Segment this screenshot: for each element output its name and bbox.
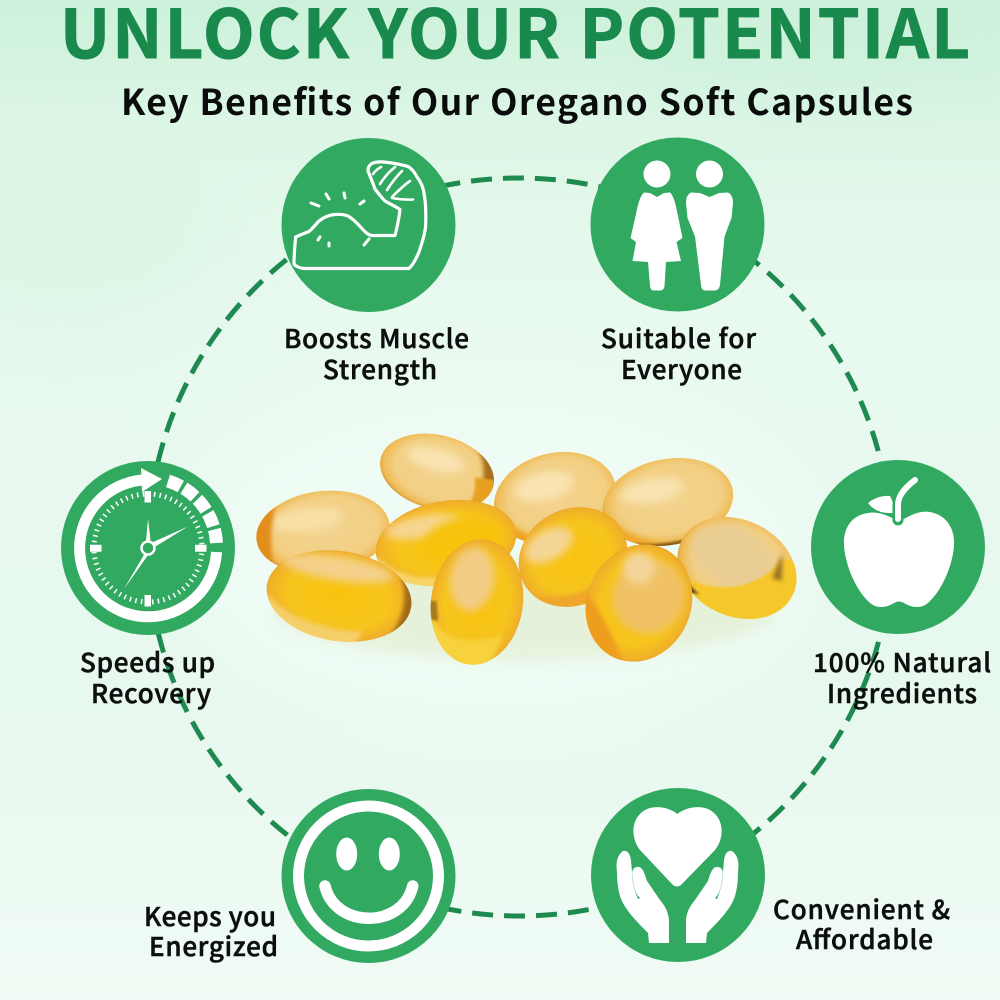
icon: clock (61, 461, 235, 635)
label: speeds up recovery (80, 643, 215, 711)
icon: smiley (282, 789, 456, 963)
capsule 6 (266, 550, 412, 642)
capsule 5 (376, 500, 516, 586)
capsule 1 (380, 434, 494, 506)
label: suitable for everyone: Suitable for (601, 319, 756, 356)
label: boosts muscle strength (284, 319, 469, 387)
label: keeps you energized (144, 897, 278, 964)
label: speeds up recovery: Speeds up (80, 643, 215, 680)
capsule 4 (256, 490, 390, 566)
capsule 8 (518, 507, 628, 607)
label: convenient and affordable (773, 890, 950, 957)
label: suitable for everyone (601, 319, 756, 387)
capsule shadow (275, 560, 775, 660)
label: suitable for everyone: Everyone (621, 350, 742, 387)
label: natural ingredients (813, 643, 991, 711)
label: convenient and affordable: Affordable (796, 920, 933, 957)
icon: hands and heart (591, 788, 765, 962)
label: natural ingredients: 100% Natural (813, 643, 991, 680)
label: speeds up recovery: Recovery (91, 674, 211, 711)
label: boosts muscle strength: Strength (323, 350, 437, 387)
icon: apple (811, 460, 985, 634)
capsule 7 (430, 540, 524, 665)
icon: muscle (282, 138, 456, 312)
clock ticks (94, 494, 202, 602)
capsule 9 (678, 517, 797, 619)
label: keeps you energized: Energized (149, 927, 278, 964)
label: natural ingredients: Ingredients (827, 674, 977, 711)
speed arrow (80, 480, 217, 617)
label: boosts muscle strength: Boosts Muscle (284, 319, 469, 356)
label: convenient and affordable: Convenient & (773, 890, 950, 927)
subtitle: Key Benefits of Our Oregano Soft Capsules (121, 75, 913, 126)
capsule 2 (494, 452, 615, 541)
icon: people (590, 138, 764, 312)
dashed ring connecting benefits (148, 178, 891, 916)
label: keeps you energized: Keeps you (144, 897, 276, 934)
clock hands (124, 519, 188, 589)
capsule 10 (586, 544, 692, 662)
capsule 3 (602, 458, 734, 546)
capsules photo (248, 422, 821, 683)
